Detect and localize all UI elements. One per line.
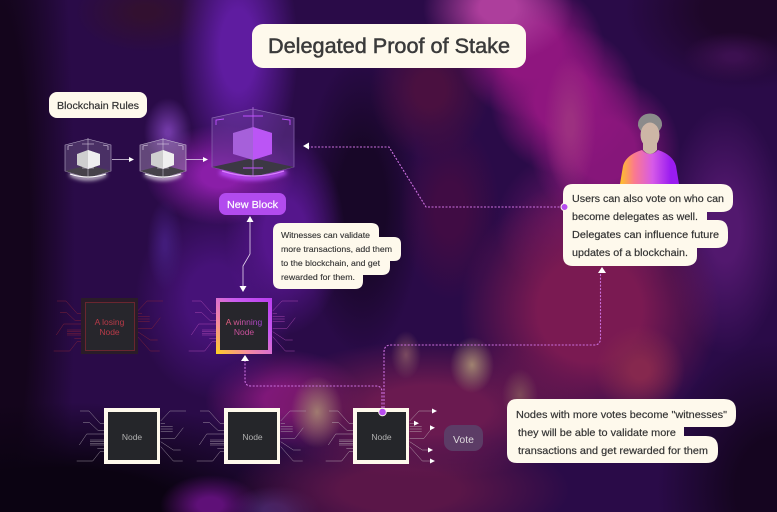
label: vote xyxy=(444,425,483,451)
node: voter two xyxy=(197,408,306,464)
node: winning: Node xyxy=(234,327,254,337)
callout: witnesses xyxy=(273,223,401,289)
callout: nodes with more votes xyxy=(507,399,736,463)
node: winning: A winning xyxy=(226,317,262,327)
node: voter one xyxy=(77,408,186,464)
icon: new block cube xyxy=(212,107,294,178)
node: losing xyxy=(54,298,163,354)
label: new block: New Block xyxy=(227,199,279,211)
callout: nodes with more votes: transactions and get rewarded for them xyxy=(518,445,708,457)
callout: nodes with more votes: Nodes with more votes become "witnesses" xyxy=(516,409,727,421)
callout: witnesses: more transactions, add them xyxy=(281,244,392,254)
callout: nodes with more votes: they will be able to validate more xyxy=(518,427,676,439)
callout: users can vote: become delegates as well. xyxy=(572,212,698,223)
connector: winning node to new block xyxy=(240,216,254,292)
node: winning xyxy=(189,298,298,354)
callout: witnesses: Witnesses can validate xyxy=(281,230,370,240)
dot: vote origin xyxy=(379,408,386,416)
node: voter one: Node xyxy=(122,432,142,442)
dot: user connector xyxy=(561,204,568,210)
callout: witnesses: rewarded for them. xyxy=(281,272,355,282)
node: voter three with vote arrows: Node xyxy=(371,432,392,442)
icon: person xyxy=(619,114,680,190)
callout: users can vote: Users can also vote on who can xyxy=(572,194,724,205)
title xyxy=(252,24,526,68)
callout: users can vote: Delegates can influence future xyxy=(572,230,719,241)
callout: users can vote xyxy=(563,184,733,266)
callout: users can vote: updates of a blockchain. xyxy=(572,248,688,259)
callout: witnesses: to the blockchain, and get xyxy=(281,258,381,268)
label: blockchain rules: Blockchain Rules xyxy=(57,100,139,112)
label: new block xyxy=(219,193,286,215)
title: Delegated Proof of Stake xyxy=(268,34,510,58)
icon: first chain block xyxy=(65,138,111,178)
node: losing: A losing xyxy=(95,317,125,327)
label: vote: Vote xyxy=(453,434,474,446)
arrow: first block to second xyxy=(112,157,134,162)
dotted connector: node to user bubble xyxy=(384,267,606,408)
dotted connector: user to new block xyxy=(303,142,563,207)
node: voter three with vote arrows xyxy=(326,408,437,464)
arrow: second block to new block xyxy=(186,157,208,162)
dotted connector: node to winning node xyxy=(241,355,382,408)
icon: second chain block xyxy=(140,138,186,178)
node: losing: Node xyxy=(99,327,120,337)
node: voter two: Node xyxy=(242,432,263,442)
label: blockchain rules xyxy=(49,92,147,118)
